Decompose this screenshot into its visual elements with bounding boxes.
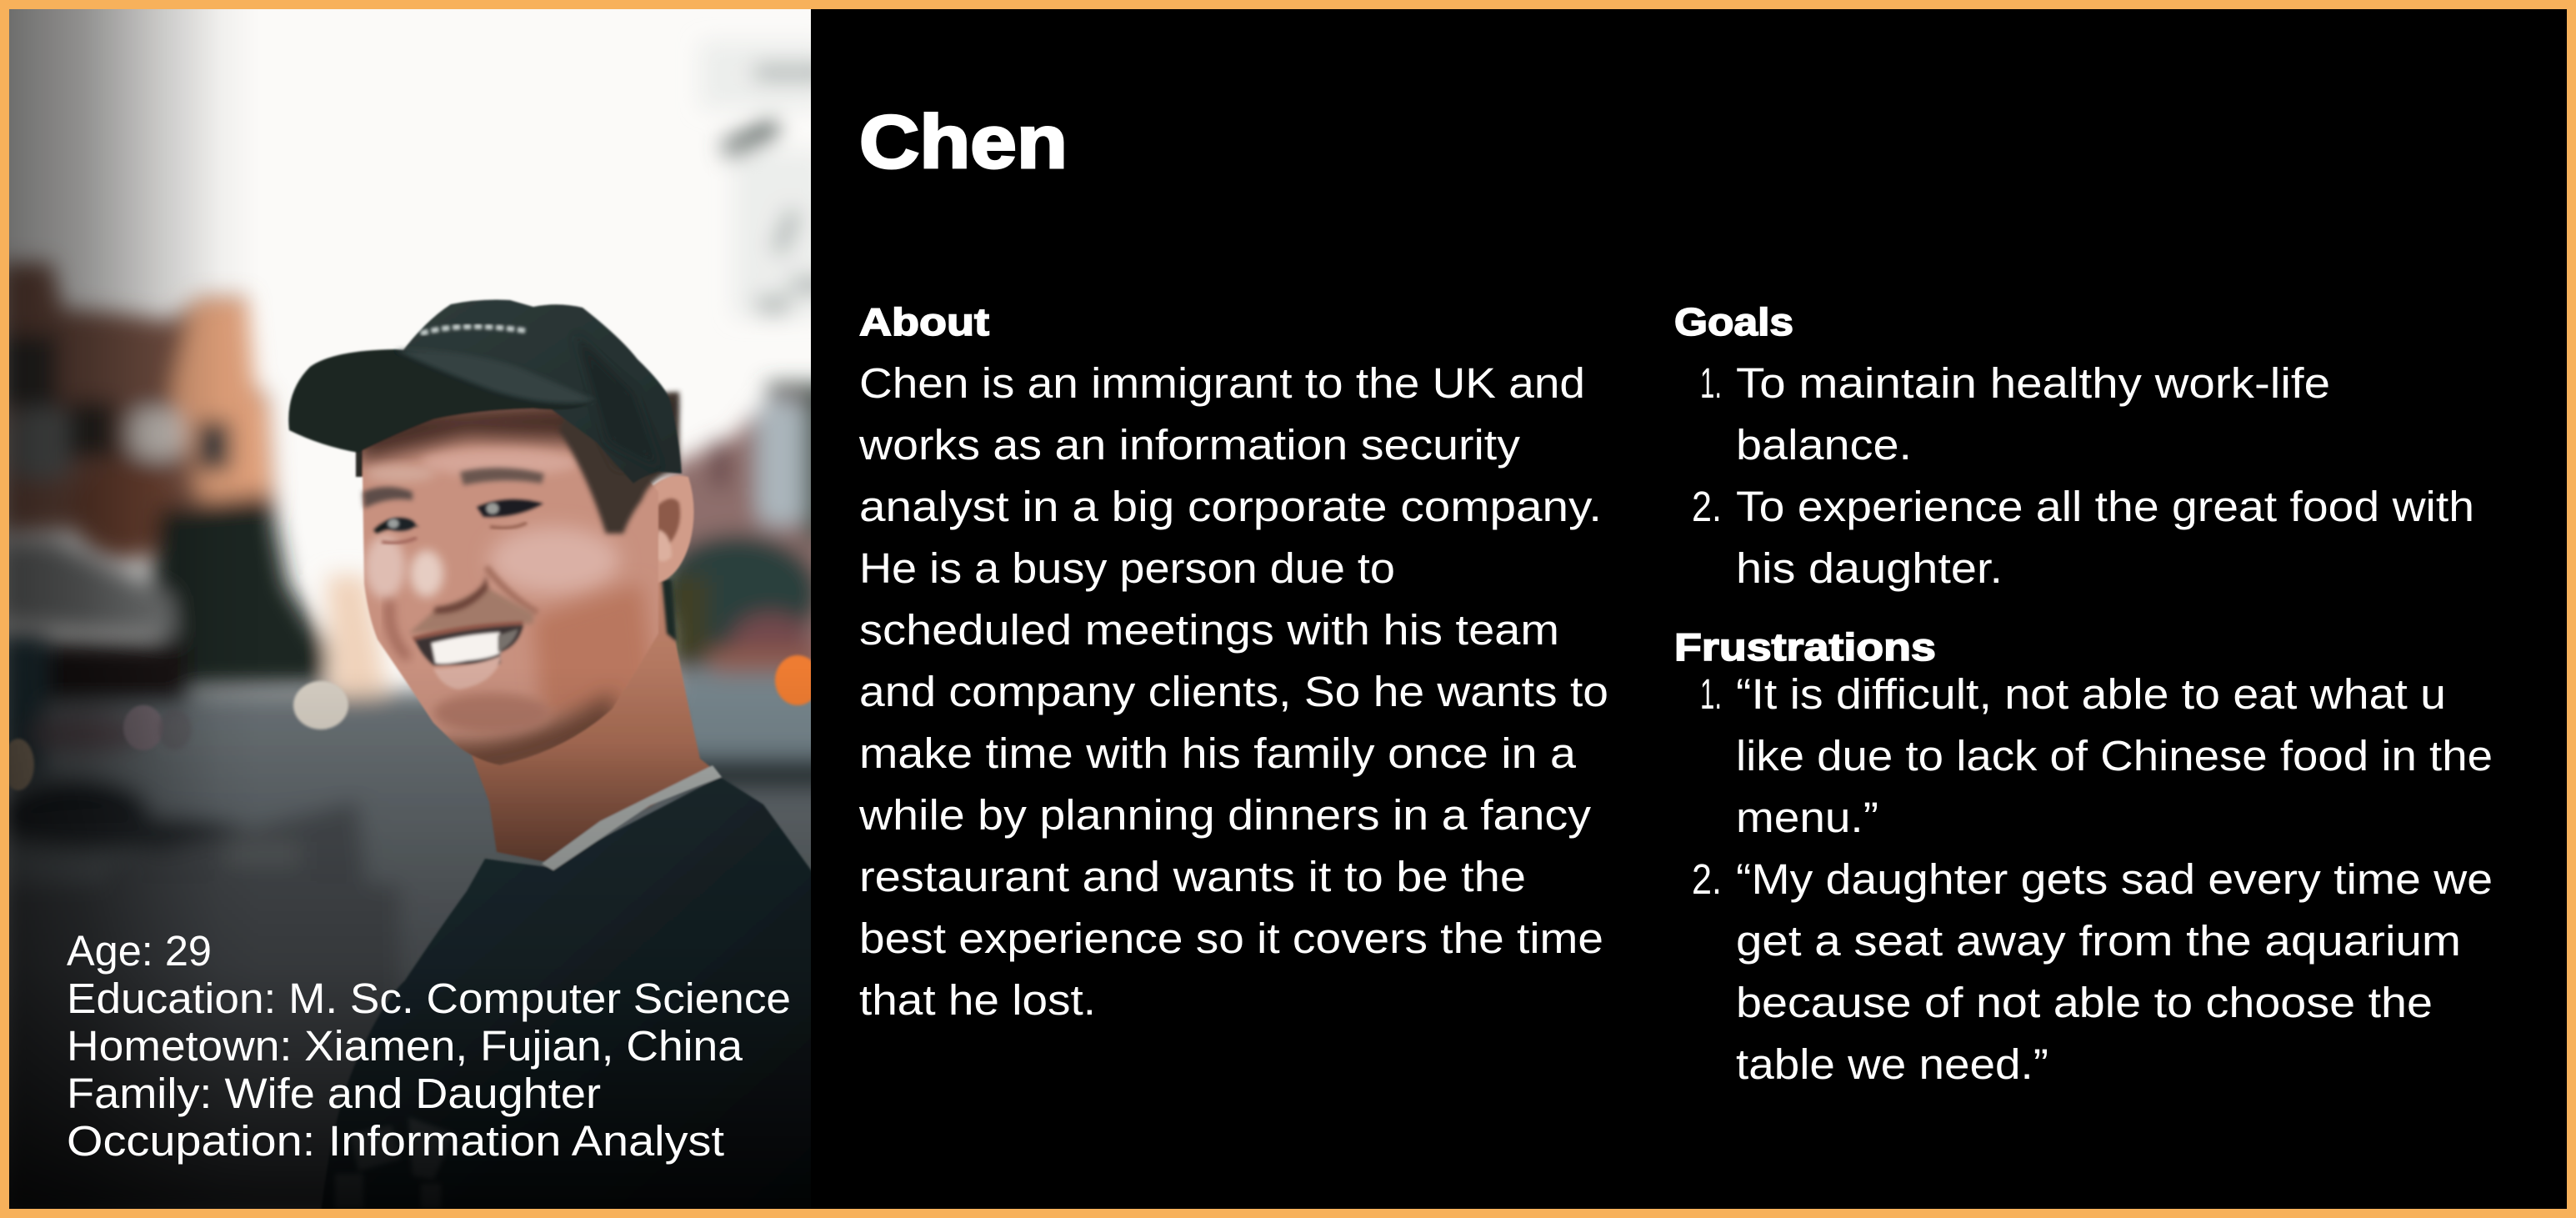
demographics text [67, 927, 791, 1165]
demographics text: Family: Wife and Daughter [67, 1070, 601, 1117]
eyebrows [363, 487, 413, 509]
goals list: balance. [1736, 421, 1912, 469]
hair [558, 392, 679, 534]
demographics text: Occupation: Information Analyst [67, 1117, 724, 1165]
about section [858, 300, 1608, 1024]
road bands [42, 800, 400, 1025]
left buildings [0, 263, 275, 559]
mouth interior [415, 625, 523, 665]
crown [400, 300, 682, 484]
demographics text: Education: M. Sc. Computer Science [67, 975, 791, 1022]
right car [675, 639, 811, 799]
frustrations list: 2. [1692, 855, 1722, 903]
about body text: that he lost. [859, 976, 1096, 1024]
brim [288, 349, 597, 453]
eyes [373, 519, 419, 534]
frustrations list: get a seat away from the aquarium [1736, 917, 2461, 965]
blurred street background [0, 42, 867, 1218]
ear [653, 474, 695, 583]
peach glow behind face [327, 575, 388, 699]
goals list: his daughter. [1736, 544, 2003, 592]
goals list: To experience all the great food with [1736, 483, 2474, 530]
about body text: while by planning dinners in a fancy [858, 791, 1592, 839]
about heading: About [859, 300, 989, 343]
right trees [654, 534, 821, 670]
lower cheek warm tone [533, 584, 658, 717]
neck hair shadow [662, 579, 677, 642]
frustrations list: table we need.” [1736, 1040, 2048, 1088]
frustrations list: menu.” [1736, 794, 1878, 841]
shirt [321, 777, 821, 1213]
demographics text: Hometown: Xiamen, Fujian, China [67, 1022, 743, 1070]
lower lip [433, 655, 502, 689]
about body text [858, 359, 1608, 1024]
black content panel [811, 9, 2567, 1209]
jaw stubble shadow [425, 692, 621, 779]
left awning and shopfront [0, 542, 250, 852]
dark gradient overlays [9, 9, 259, 1209]
about body text: and company clients, So he wants to [859, 668, 1608, 715]
bokeh lights [3, 655, 820, 790]
goals list: To maintain healthy work-life [1736, 359, 2330, 407]
about body text: best experience so it covers the time [859, 915, 1603, 962]
neck [467, 567, 716, 862]
mouth [412, 621, 523, 689]
nose [410, 550, 488, 614]
about body text: works as an information security [858, 421, 1521, 469]
panel: portrait photo [0, 9, 867, 1218]
about body text: restaurant and wants it to be the [859, 853, 1526, 900]
left dark tree [150, 500, 327, 688]
chin tone [433, 693, 550, 733]
road and street [9, 675, 811, 1002]
about body text: He is a busy person due to [859, 544, 1395, 592]
about body text: scheduled meetings with his team [859, 606, 1559, 654]
frustrations list: 1. [1700, 670, 1722, 718]
frustrations heading: Frustrations [1674, 625, 1936, 669]
title: Chen [859, 101, 1068, 184]
cap logo [421, 327, 527, 333]
sideburn left [356, 450, 363, 477]
upper lip [412, 621, 523, 642]
cheek highlights [489, 527, 619, 594]
right background buildings [667, 383, 833, 684]
about body text: Chen is an immigrant to the UK and [859, 359, 1585, 407]
cap [288, 300, 682, 484]
forehead shadow [361, 407, 572, 472]
shirt print [338, 1119, 452, 1204]
frustrations list: because of not able to choose the [1736, 979, 2433, 1026]
face [362, 407, 660, 765]
demographics text: Age: 29 [67, 927, 212, 975]
tree branches top right [702, 42, 811, 327]
goals section [1674, 300, 2474, 592]
collar [542, 765, 722, 870]
about body text: make time with his family once in a [859, 729, 1577, 777]
frustrations list: “My daughter gets sad every time we [1736, 855, 2493, 903]
frustrations section [1674, 625, 2493, 1088]
goals heading: Goals [1674, 300, 1793, 343]
smile fold [486, 567, 538, 613]
frustrations list [1692, 670, 2493, 1088]
frustrations list: like due to lack of Chinese food in the [1736, 732, 2493, 779]
teeth [431, 632, 500, 664]
goals list [1692, 359, 2474, 592]
sky backdrop [9, 9, 811, 1004]
man [288, 300, 821, 1213]
under nose shading [408, 588, 533, 634]
goals list: 2. [1692, 483, 1722, 530]
about body text: analyst in a big corporate company. [859, 483, 1602, 530]
goals list: 1. [1700, 359, 1722, 407]
frustrations list: “It is difficult, not able to eat what u [1736, 670, 2446, 718]
forehead light [421, 449, 579, 476]
